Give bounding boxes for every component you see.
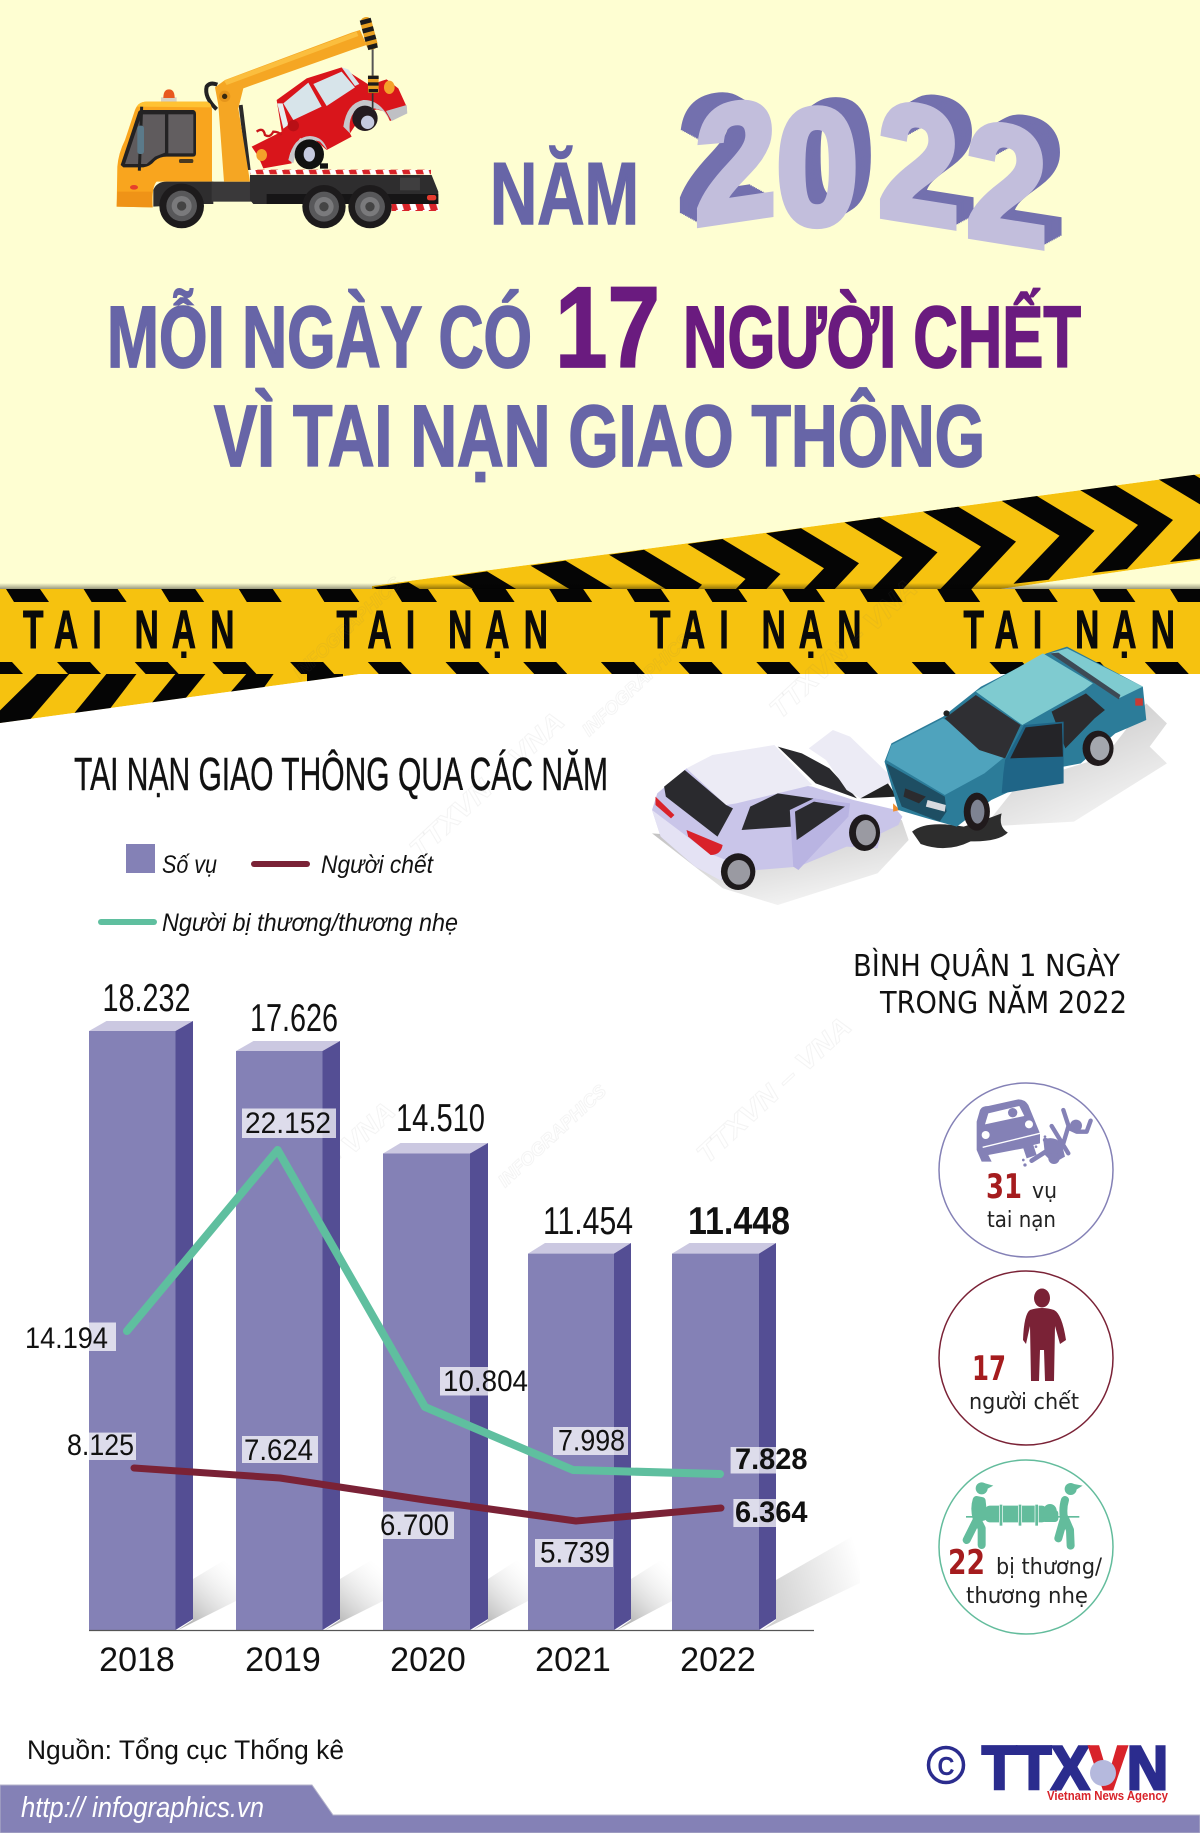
heading number: digit 2 (3D, fourth): 2 [966,86,1047,283]
watermarks: TTXVN – VNA [764,573,923,724]
injured 2019: 22.152 [245,1107,331,1140]
watermarks: INFOGRAPHICS [578,630,694,740]
heading word: NĂM: NĂM [490,144,639,243]
daily average heading: TRONG NĂM 2022 [879,984,1127,1021]
legend text: số vụ: Số vụ [162,851,217,879]
source note: Nguồn: Tổng cục Thống kê [27,1735,344,1765]
heading number: digit 2 (3D): 2 [695,64,776,260]
value 2018: 18.232 [102,977,190,1020]
year axis labels: 2018 [99,1641,175,1679]
label: bị thương: bị thương/ [996,1555,1103,1580]
copyright mark: C [938,1751,955,1781]
watermarks: TTXVN – VNA [691,1011,857,1169]
headline line 1: MỖI NGÀY CÓ: MỖI NGÀY CÓ [107,288,532,386]
logo tagline: Vietnam News Agency [1047,1788,1169,1803]
circle: 31 accidents [939,1083,1113,1257]
legend swatch: người bị thương [101,919,154,925]
legend text: người bị thương: Người bị thương/thương nhẹ [162,909,458,937]
line: người chết [134,1468,721,1521]
bar shadows [178,1532,860,1630]
watermarks [242,573,923,1247]
injured 2020: 10.804 [443,1365,528,1398]
footer band [0,1785,1200,1833]
bar 2022 [672,1243,776,1630]
icon: two crashed cars [652,647,1167,905]
straight warning tape with repeated text [0,589,1200,674]
label: thương nhẹ: thương nhẹ [966,1584,1088,1609]
icon: car hitting motorbike [977,1099,1091,1167]
deaths 2021: 5.739 [540,1537,610,1570]
label boxes [23,1108,806,1567]
watermarks: TTXVN – VNA [404,706,570,864]
copyright mark [928,1748,964,1782]
label: người chết: người chết [969,1390,1079,1415]
year axis labels [99,1641,756,1679]
deaths 2022: 6.364 [735,1496,808,1529]
number: 22: 22 [948,1543,985,1583]
tape label 2: TAI NẠN [336,599,548,660]
value 2021: 11.454 [543,1200,633,1243]
watermarks: INFOGRAPHICS [289,573,405,683]
chart baseline [89,1630,814,1632]
tape label 3: TAI NẠN [650,599,861,660]
daily average heading [853,948,1127,1021]
number: 17: 17 [972,1349,1006,1389]
bar value labels [102,977,790,1243]
legend swatch: người chết [254,861,307,867]
deaths 2020: 6.700 [380,1509,449,1542]
injured 2018: 14.194 [25,1322,108,1355]
watermarks: TTXVN – VNA [242,1096,401,1247]
watermarks: INFOGRAPHICS [494,1081,610,1191]
injured 2021: 7.998 [558,1424,625,1458]
daily average heading: BÌNH QUÂN 1 NGÀY [853,948,1121,984]
tape label 1: TAI NẠN [23,599,234,660]
legend text: người chết: Người chết [321,851,434,879]
footer url: http:// infographics.vn [21,1792,264,1824]
deaths 2019: 7.624 [244,1434,313,1467]
year axis labels: 2019 [245,1641,321,1679]
shadow above straight tape [0,583,1200,589]
year axis labels: 2020 [390,1641,466,1679]
value 2020: 14.510 [396,1097,485,1140]
headline block [107,264,1081,485]
circle: 22 injured [939,1460,1113,1634]
bar 2018 [89,1021,193,1630]
number: 31: 31 [986,1167,1022,1207]
cream header background [0,0,1200,589]
legend swatch: số vụ [126,844,155,873]
heading number: digit 0 (3D): 0 [776,75,859,259]
label: vụ: vụ [1032,1179,1057,1204]
icon: person [1023,1288,1066,1381]
deaths 2018: 8.125 [67,1429,134,1462]
tape label 4: TAI NẠN [964,599,1175,660]
diagonal chevron tape, upper right [372,474,1200,589]
chart legend [101,844,458,937]
bar 2019 [236,1041,340,1630]
injured 2022: 7.828 [735,1443,808,1476]
value 2019: 17.626 [250,997,338,1040]
value 2022: 11.448 [688,1200,790,1243]
year axis labels: 2021 [535,1641,611,1679]
chart: accidents, deaths and injuries by year [23,977,860,1679]
circle: 17 deaths [939,1271,1113,1445]
year axis labels: 2022 [680,1641,756,1679]
label: tai nạn: tai nạn [987,1208,1056,1233]
line: người bị thương [127,1150,720,1474]
bar 2020 [383,1143,488,1630]
section title: TAI NẠN GIAO THÔNG QUA CÁC NĂM [74,748,608,800]
bar 2021 [528,1243,631,1630]
headline number: 17: 17 [555,264,660,392]
diagonal chevron tape, lower left [0,674,360,723]
line value labels [25,1107,808,1570]
logo: TTXVN Vietnam News Agency: TTXVN [982,1734,1168,1802]
icon: stretcher carried by two people [966,1482,1083,1546]
icon: tow truck lifting a crashed red car [117,16,440,228]
heading number: digit 2 (3D, third): 2 [878,66,959,263]
